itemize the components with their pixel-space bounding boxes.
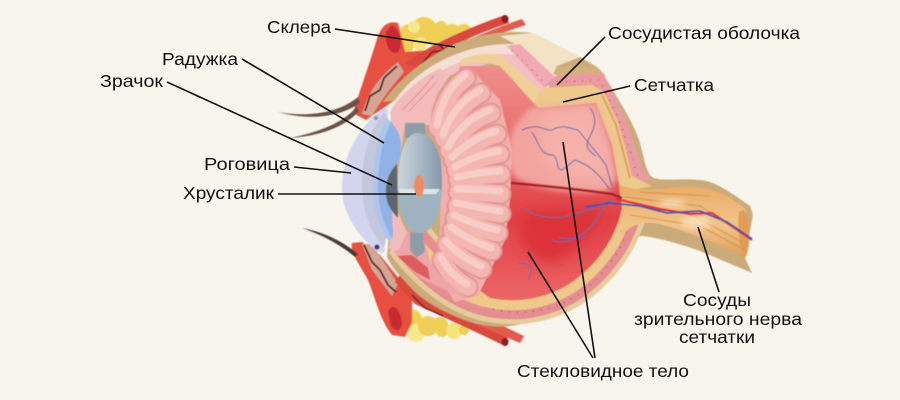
lens nucleus [414, 175, 424, 197]
zonule fibers [405, 123, 426, 140]
fat tissue top [398, 17, 472, 52]
upper wall: pink inner [396, 54, 552, 125]
label: pupil: Зрачок [100, 71, 163, 91]
muscle tubes bottom [395, 272, 508, 346]
label: iris: Радужка [162, 49, 238, 69]
label: cornea: Роговица [204, 154, 290, 174]
cornea mid layer [362, 112, 390, 248]
lower wall bands [408, 205, 632, 312]
step tan [553, 66, 606, 76]
lower chamber glow [520, 208, 600, 262]
nerve vein [585, 203, 752, 239]
label: optic nerve vessels: сетчатки [679, 327, 755, 347]
central red vessel [445, 178, 622, 198]
optic nerve [612, 186, 746, 258]
right wall: choroid [544, 73, 652, 182]
right wall: retina [534, 85, 652, 192]
choroid strip top [507, 44, 556, 88]
nerve artery [616, 199, 752, 240]
cornea [342, 108, 388, 253]
pupil crescent [386, 164, 398, 218]
anterior chamber [373, 118, 400, 245]
eyelid upper [353, 22, 440, 120]
lashes [278, 97, 360, 117]
label: optic nerve vessels: зрительного нерва [634, 309, 802, 329]
iris blue [378, 122, 401, 243]
leader lines [167, 29, 719, 358]
upper iris pink [390, 68, 448, 163]
retina cut diagonal [460, 54, 540, 104]
ciliary fins [427, 68, 512, 302]
label: vitreous body: Стекловидное тело [517, 361, 689, 381]
fat tissue bottom [400, 309, 469, 342]
lower iris pink [390, 210, 468, 300]
back wall of retina [509, 104, 617, 192]
blood vessels on retina [518, 108, 612, 280]
eyelid lower [352, 242, 412, 337]
lens [398, 133, 442, 233]
label: choroid: Сосудистая оболочка [608, 23, 800, 43]
label: optic nerve vessels: Сосуды [683, 290, 751, 310]
eye illustration [278, 15, 753, 346]
vitreous chamber [440, 66, 622, 300]
cream cut top [500, 33, 580, 74]
label: sclera: Склера [267, 17, 331, 37]
label: retina: Сетчатка [634, 75, 714, 95]
sclera shell with optic nerve [383, 32, 753, 327]
upper wall: sclera rim [390, 44, 560, 125]
muscle tubes top [405, 15, 509, 68]
label: optic nerve vessels [634, 290, 802, 347]
lower iris tip [388, 211, 407, 252]
label: lens: Хрусталик [183, 183, 274, 203]
